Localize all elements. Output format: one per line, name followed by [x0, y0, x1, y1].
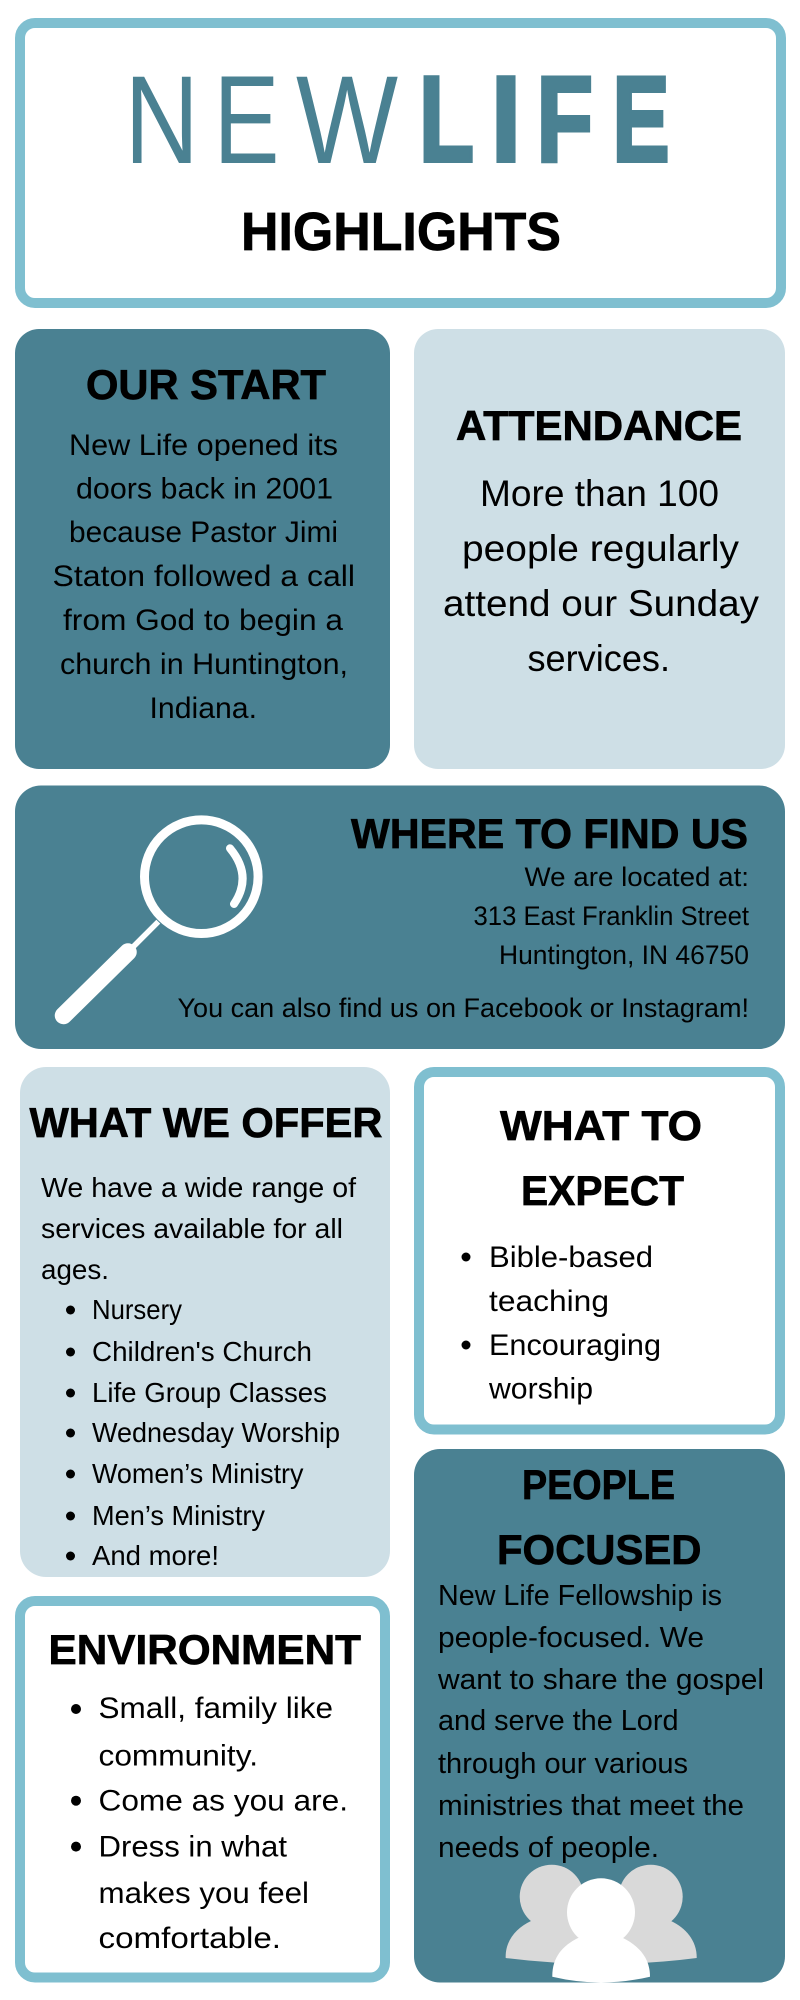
text: our start body: because Pastor Jimi — [69, 516, 338, 549]
icon: group of people — [506, 1865, 697, 1982]
text: people focused body: needs of people. — [438, 1832, 659, 1864]
heading: environment: ENVIRONMENT — [48, 1626, 361, 1673]
heading: people focused: FOCUSED — [497, 1526, 702, 1573]
list: expectations: Encouraging — [489, 1329, 661, 1362]
panel: what we offer — [20, 1067, 390, 1577]
text: offer intro: services available for all — [41, 1213, 343, 1244]
panel: header — [20, 23, 781, 303]
heading: people focused: PEOPLE — [522, 1461, 675, 1508]
heading: what to expect: EXPECT — [521, 1167, 684, 1214]
list: services: Children's Church — [92, 1336, 312, 1367]
heading: highlights: HIGHLIGHTS — [241, 202, 561, 262]
list: expectations: teaching — [489, 1285, 609, 1318]
text: offer intro: We have a wide range of — [41, 1172, 356, 1203]
text: address — [178, 862, 750, 1023]
text: people focused body: and serve the Lord — [438, 1705, 678, 1737]
text: people focused body — [437, 1580, 764, 1864]
text: address: We are located at: — [524, 862, 749, 892]
heading: our start: OUR START — [86, 361, 326, 408]
text: offer intro — [41, 1172, 356, 1285]
text: address: You can also find us on Facebook or Instagram! — [178, 993, 749, 1023]
list: environment points — [71, 1692, 348, 1955]
title: New Life: E — [612, 51, 670, 187]
panel: attendance — [414, 329, 785, 769]
title: New Life: I — [491, 51, 521, 187]
text: people focused body: through our various — [438, 1748, 688, 1780]
heading: where to find us: WHERE TO FIND US — [351, 810, 748, 857]
text: our start body: church in Huntington, — [60, 648, 348, 681]
text: our start body: from God to begin a — [63, 604, 343, 637]
heading: what to expect: WHAT TO — [500, 1102, 702, 1149]
list: expectations — [462, 1241, 661, 1406]
title: New Life: F — [536, 51, 593, 187]
panel: people focused — [414, 1449, 785, 1982]
title: New Life: W — [296, 51, 398, 190]
list: services — [66, 1294, 340, 1571]
list: services: Men’s Ministry — [92, 1500, 265, 1531]
text: our start body: doors back in 2001 — [76, 472, 333, 506]
panel: where to find us — [15, 786, 785, 1049]
list: environment points: Come as you are. — [98, 1785, 348, 1818]
list: services: Life Group Classes — [92, 1377, 327, 1408]
panel: environment — [20, 1601, 385, 1978]
heading: what we offer: WHAT WE OFFER — [30, 1099, 382, 1146]
title: New Life: E — [214, 51, 280, 190]
text: address: Huntington, IN 46750 — [499, 940, 749, 970]
text: offer intro: ages. — [41, 1254, 109, 1285]
icon: magnifying glass — [64, 820, 258, 1016]
text: people focused body: New Life Fellowship is — [438, 1580, 722, 1612]
text: people focused body: want to share the gospel — [437, 1664, 764, 1696]
panel: what to expect — [419, 1072, 780, 1430]
list: environment points: Small, family like — [98, 1692, 333, 1725]
text: address: 313 East Franklin Street — [474, 901, 750, 931]
heading: attendance: ATTENDANCE — [456, 402, 742, 449]
title: New Life: L — [419, 51, 474, 187]
list: environment points: makes you feel — [98, 1877, 309, 1910]
text: people focused body: ministries that meet the — [438, 1790, 744, 1822]
list: services: Nursery — [92, 1294, 182, 1325]
text: attendance body: More than 100 — [480, 473, 719, 514]
list: services: Wednesday Worship — [92, 1417, 340, 1448]
text: our start body: Indiana. — [150, 692, 257, 725]
text: people focused body: people-focused. We — [438, 1622, 704, 1654]
list: expectations: Bible-based — [489, 1241, 653, 1274]
title: New Life — [124, 51, 670, 190]
list: services: And more! — [92, 1540, 219, 1571]
text: attendance body: services. — [528, 638, 670, 679]
text: attendance body: attend our Sunday — [443, 583, 760, 624]
heading: what to expect — [500, 1102, 702, 1214]
title: New Life: N — [124, 51, 199, 190]
text: our start body: Staton followed a call — [52, 560, 355, 593]
list: environment points: community. — [98, 1740, 258, 1772]
text: attendance body: people regularly — [462, 528, 740, 569]
text: attendance body — [443, 473, 760, 679]
heading: people focused — [497, 1461, 702, 1573]
list: environment points: Dress in what — [98, 1830, 288, 1864]
list: services: Women’s Ministry — [92, 1458, 304, 1489]
text: our start body: New Life opened its — [69, 429, 338, 462]
list: environment points: comfortable. — [98, 1922, 281, 1955]
panel: our start — [15, 329, 390, 769]
list: expectations: worship — [488, 1372, 593, 1406]
text: our start body — [52, 429, 355, 725]
